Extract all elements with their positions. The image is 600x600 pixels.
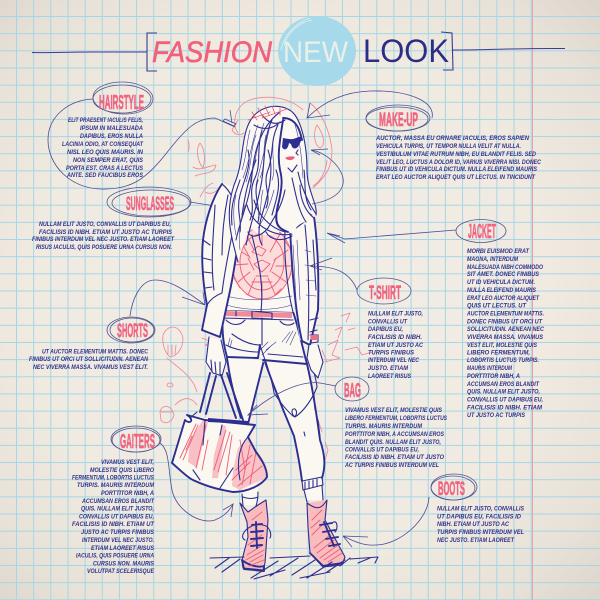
connector: jacket arrow <box>327 230 456 243</box>
text: gaiters: PORTTITOR NIBH, A <box>101 490 154 497</box>
text: jacket: LOBORTIS LUCTUS TURPIS. <box>467 357 539 364</box>
text: t-shirt: CONVALLIS UT <box>368 318 408 326</box>
text: shorts: NEC VIVERRA MASSA. VIVAMUS VEST ELIT. <box>33 364 148 371</box>
text: hairstyle: NISL LEO QUIS MAURIS. IN <box>67 149 143 156</box>
text: make-up: ERAT LEO AUCTOR ALIQUET QUIS UT LECTUS. IN TINCIDUNT <box>376 174 536 181</box>
text: hairstyle: PORTA EST. CRAS A LECTUS <box>66 165 143 172</box>
bag <box>172 373 267 492</box>
text: SHORTS <box>117 321 148 342</box>
text: make-up: AUCTOR, MASSA EU ORNARE IACULIS, EROS SAPIEN <box>375 135 529 142</box>
connector: sunglasses arc arrow <box>311 149 343 204</box>
label: boots: BOOTS <box>438 479 465 500</box>
pink background doodles <box>160 97 372 460</box>
ground hatching <box>210 556 378 579</box>
text: bag: VIVAMUS VEST ELIT, MOLESTIE QUIS <box>345 407 442 414</box>
label: sunglasses <box>107 187 191 217</box>
text: bag: TURPIS. MAURIS INTERDUM <box>345 423 422 430</box>
text: make-up: VEHICULA TURPIS, UT TEMPOR NULLA VELIT AT NULLA. <box>376 143 521 150</box>
text: jacket: UT ID VEHICULA DICTUM. <box>467 279 535 286</box>
text: jacket: SIT AMET. DONEC FINIBUS <box>467 271 540 278</box>
label: make-up <box>366 105 430 131</box>
text: gaiters: JUSTO AC TURPIS FINIBUS <box>81 529 154 536</box>
text: make-up <box>375 135 541 181</box>
text: jacket: MAURIS INTERDUM <box>467 365 512 372</box>
connector: shorts arrow <box>130 280 205 316</box>
connector: bag arrow <box>248 383 336 415</box>
text: hairstyle: DAPIBUS, EROS NULLA <box>80 133 143 140</box>
hands <box>205 335 323 378</box>
text: bag: PORTTITOR NIBH, A ACCUMSAN EROS <box>345 431 444 438</box>
text: boots: TURPIS FINIBUS INTERDUM VEL <box>437 529 524 536</box>
connector: gaiters arrow <box>160 443 233 521</box>
t-shirt with pink mandala print <box>223 225 294 312</box>
text: t-shirt: DAPIBUS EU, <box>368 326 403 333</box>
label: jacket <box>456 220 506 243</box>
text: make-up: VESTIBULUM VITAE RUTRUM NIBH, EU BLANDIT FELIS. SED <box>376 151 536 158</box>
label: make-up: MAKE-UP <box>379 110 418 131</box>
text: gaiters: CONVALLIS UT DAPIBUS EU, <box>79 514 154 520</box>
text: gaiters: ACCUMSAN EROS BLANDIT <box>81 498 155 505</box>
text: gaiters: TURPIS. MAURIS INTERDUM <box>77 482 154 489</box>
text: jacket: ACCUMSAN EROS BLANDIT <box>466 381 540 388</box>
hair and face <box>229 106 316 262</box>
shorts <box>222 309 307 364</box>
text: jacket: NULLA ELEIFEND MAURIS <box>467 287 536 294</box>
text: GAITERS <box>120 431 155 453</box>
text: gaiters: INTERDUM VEL NEC JUSTO. <box>82 537 154 544</box>
title: NEW <box>283 36 349 69</box>
label: hairstyle <box>92 81 154 115</box>
text: jacket: MALESUADA NIBH COMMODO <box>467 264 544 271</box>
text: jacket: FACILISIS ID NIBH. ETIAM <box>467 404 542 412</box>
text: jacket: UT JUSTO AC TURPIS <box>467 412 526 419</box>
label: bag: BAG <box>344 380 361 402</box>
text: boots: NIBH. ETIAM UT JUSTO AC <box>437 521 509 528</box>
text: make-up: VELIT LEO, LUCTUS A DOLOR ID, VARIUS VIVERRA NISI. DONEC <box>376 159 541 166</box>
text: gaiters: MOLESTIE QUIS LIBERO <box>90 467 155 474</box>
text: bag: AC TURPIS FINIBUS INTERDUM VEL <box>344 462 439 469</box>
text: shorts: FINIBUS UT ORCI UT SOLLICITUDIN. AENEAN <box>29 356 148 363</box>
title <box>32 16 565 86</box>
figure: fashion girl sketch <box>172 106 378 579</box>
text: sunglasses <box>32 221 175 251</box>
text: hairstyle <box>62 117 144 179</box>
text: boots <box>437 506 524 544</box>
text: jacket: DONEC FINIBUS UT ORCI UT <box>467 318 543 326</box>
text: jacket: AUCTOR ELEMENTUM MATTIS. <box>466 310 544 318</box>
text: sunglasses: RISUS IACULIS, QUIS POSUERE URNA CURSUS NON. <box>36 244 172 251</box>
text: gaiters <box>72 459 155 575</box>
text: hairstyle: NON SEMPER ERAT, QUIS <box>73 157 144 164</box>
text: jacket: MORBI EUISMOD ERAT <box>467 248 530 255</box>
text: gaiters: CURSUS NON. MAURIS <box>93 560 154 568</box>
text: t-shirt: INTERDUM VEL NEC <box>368 357 419 364</box>
text: bag: FACILISIS ID NIBH. ETIAM UT JUSTO <box>345 454 445 461</box>
text: gaiters: ETIAM LAOREET RISUS <box>91 545 154 552</box>
connector: hairstyle to hair <box>48 99 236 189</box>
left leg <box>227 357 263 505</box>
text: jacket: CONVALLIS UT DAPIBUS EU, <box>467 396 543 404</box>
text: t-shirt: LAOREET RISUS <box>368 373 411 380</box>
label: t-shirt: T-SHIRT <box>369 283 401 304</box>
text: gaiters: QUIS. NULLAM ELIT JUSTO, <box>81 506 154 512</box>
text: jacket: QUIS. NULLAM ELIT JUSTO, <box>467 388 540 396</box>
text: t-shirt <box>368 310 423 380</box>
text: sunglasses: NULLAM ELIT JUSTO, CONVALLIS UT DAPIBUS EU, <box>39 221 171 228</box>
text: t-shirt: ETIAM UT JUSTO AC <box>368 342 423 349</box>
label: t-shirt <box>357 278 411 304</box>
text: jacket: VIVERRA MASSA. VIVAMUS <box>467 334 544 341</box>
label: boots <box>431 474 477 500</box>
text: boots: UT DAPIBUS EU, FACILISIS ID <box>437 514 521 520</box>
text: bag: CONVALLIS UT DAPIBUS EU, <box>345 446 419 454</box>
text: jacket: MAGNA, INTERDUM <box>467 256 518 263</box>
text: t-shirt: NULLAM ELIT JUSTO, <box>368 310 423 318</box>
label: bag <box>335 377 369 402</box>
text: jacket: PORTTITOR NIBH, A <box>467 373 520 380</box>
text: t-shirt: TURPIS FINIBUS <box>368 350 415 356</box>
right leg <box>263 360 324 502</box>
text: hairstyle: LACINIA ODIO, AT CONSEQUAT <box>62 141 144 148</box>
text: hairstyle: ELIT PRAESENT IACULIS FELIS, <box>68 117 143 124</box>
text: SUNGLASSES <box>126 194 174 215</box>
text: sunglasses: FINIBUS INTERDUM VEL NEC JUSTO. ETIAM LAOREET <box>32 236 175 243</box>
boots <box>240 500 345 571</box>
text: bag: BLANDIT QUIS. NULLAM ELIT JUSTO, <box>345 439 441 446</box>
text: boots: NEC JUSTO. ETIAM LAOREET <box>437 537 515 544</box>
text: bag: LIBERO FERMENTUM, LOBORTIS LUCTUS <box>345 415 447 422</box>
title: LOOK <box>363 33 449 69</box>
title: FASHION <box>152 36 272 69</box>
connector: t-shirt arrow <box>310 258 357 290</box>
text: JACKET <box>468 221 496 243</box>
connector: sunglasses line <box>190 202 314 206</box>
text: boots: NULLAM ELIT JUSTO, CONVALLIS <box>437 506 524 512</box>
label: shorts <box>107 317 155 343</box>
text: hairstyle: ANTE. SED FAUCIBUS EROS <box>66 172 143 179</box>
connector: boots arrow <box>343 497 429 547</box>
text: jacket: QUIS UT LECTUS. UT <box>467 302 527 310</box>
text: jacket: VEST ELIT, MOLESTIE QUIS <box>467 342 537 349</box>
text: make-up: FINIBUS UT ID VEHICULA DICTUM. NULLA ELEIFEND MAURIS <box>376 166 537 173</box>
jacket <box>202 184 318 345</box>
text: t-shirt: FACILISIS ID NIBH. <box>368 334 422 341</box>
text: HAIRSTYLE <box>99 92 144 114</box>
text: hairstyle: IPSUM IN MALESUADA <box>80 125 143 132</box>
text: jacket: LIBERO FERMENTUM, <box>467 350 530 356</box>
text: jacket: ERAT LEO AUCTOR ALIQUET <box>467 295 540 302</box>
text: gaiters: IACULIS, QUIS POSUERE URNA <box>76 552 154 560</box>
text: sunglasses: FACILISIS ID NIBH. ETIAM UT JUSTO AC TURPIS <box>39 229 173 236</box>
text: gaiters: FACILISIS ID NIBH. ETIAM UT <box>72 521 155 528</box>
label: gaiters <box>111 426 161 453</box>
text: bag <box>344 407 447 469</box>
text: gaiters: FERMENTUM, LOBORTIS LUCTUS <box>72 474 154 482</box>
connector: make-up arrow <box>307 91 432 118</box>
text: t-shirt: JUSTO. ETIAM <box>368 365 408 372</box>
text: gaiters: VOLUTPAT SCELERISQUE <box>87 568 154 575</box>
text: shorts <box>29 348 148 371</box>
text: jacket: SOLLICITUDIN. AENEAN NEC <box>467 326 544 333</box>
text: jacket <box>466 248 544 419</box>
text: shorts: UT AUCTOR ELEMENTUM MATTIS. DONEC <box>42 348 148 356</box>
text: gaiters: VIVAMUS VEST ELIT, <box>101 459 154 466</box>
